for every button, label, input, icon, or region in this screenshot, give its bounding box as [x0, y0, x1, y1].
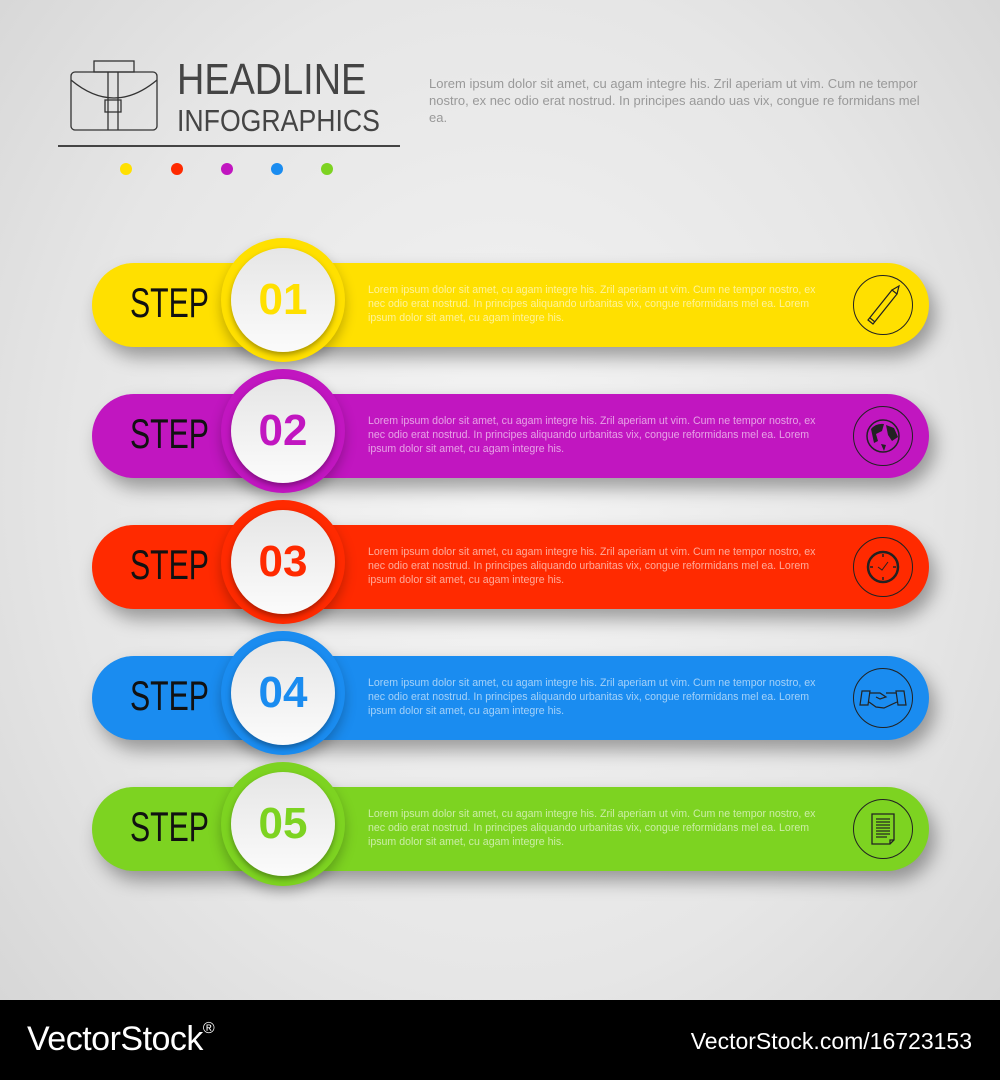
footer bar [0, 1000, 1000, 1080]
step 1 [92, 263, 929, 347]
step 5: Lorem ipsum dolor sit amet, cu agam integre his. Zril aperiam ut vim. Cum ne tempor nostro, ex nec odio erat nostrud. In principes aliquando urbanitas vix, congue reformidans mel ea. Lorem ipsum dolor sit amet, cu agam integre his. [368, 808, 815, 848]
header logo [70, 55, 380, 138]
footer bar: VectorStock.com/16723153 [691, 1028, 972, 1054]
icon: handshake [853, 668, 913, 728]
icon: document [853, 799, 913, 859]
icon: briefcase [70, 60, 158, 131]
step 2: 02 [259, 406, 307, 455]
step 1: Lorem ipsum dolor sit amet, cu agam integre his. Zril aperiam ut vim. Cum ne tempor nostro, ex nec odio erat nostrud. In principes aliquando urbanitas vix, congue reformidans mel ea. Lorem ipsum dolor sit amet, cu agam integre his. [368, 284, 815, 324]
step 1: STEP [130, 279, 209, 326]
step 3: STEP [130, 541, 209, 588]
step 4: Lorem ipsum dolor sit amet, cu agam integre his. Zril aperiam ut vim. Cum ne tempor nostro, ex nec odio erat nostrud. In principes aliquando urbanitas vix, congue reformidans mel ea. Lorem ipsum dolor sit amet, cu agam integre his. [368, 677, 815, 717]
step 5 [92, 787, 929, 871]
step 3: Lorem ipsum dolor sit amet, cu agam integre his. Zril aperiam ut vim. Cum ne tempor nostro, ex nec odio erat nostrud. In principes aliquando urbanitas vix, congue reformidans mel ea. Lorem ipsum dolor sit amet, cu agam integre his. [368, 546, 815, 586]
header logo: INFOGRAPHICS [177, 103, 380, 138]
color dots [120, 163, 333, 175]
title: HEADLINE [177, 55, 366, 104]
intro text: Lorem ipsum dolor sit amet, cu agam integre his. Zril aperiam ut vim. Cum ne tempor nostro, ex nec odio erat nostrud. In principes aando uas vix, congue re formidans mel ea. [429, 76, 920, 125]
icon: clock [853, 537, 913, 597]
step 4 [92, 656, 929, 740]
footer bar: VectorStock® [27, 1020, 214, 1058]
step 4: STEP [130, 672, 209, 719]
step 2 [92, 394, 929, 478]
step 2: Lorem ipsum dolor sit amet, cu agam integre his. Zril aperiam ut vim. Cum ne tempor nostro, ex nec odio erat nostrud. In principes aliquando urbanitas vix, congue reformidans mel ea. Lorem ipsum dolor sit amet, cu agam integre his. [368, 415, 815, 455]
step 5: STEP [130, 803, 209, 850]
icon: globe [853, 406, 913, 466]
step 3 [92, 525, 929, 609]
step 2: STEP [130, 410, 209, 457]
step 3: 03 [259, 537, 307, 586]
step 4: 04 [259, 668, 307, 717]
icon: pencil [853, 275, 913, 335]
step 1: 01 [259, 275, 307, 324]
step 5: 05 [259, 799, 307, 848]
